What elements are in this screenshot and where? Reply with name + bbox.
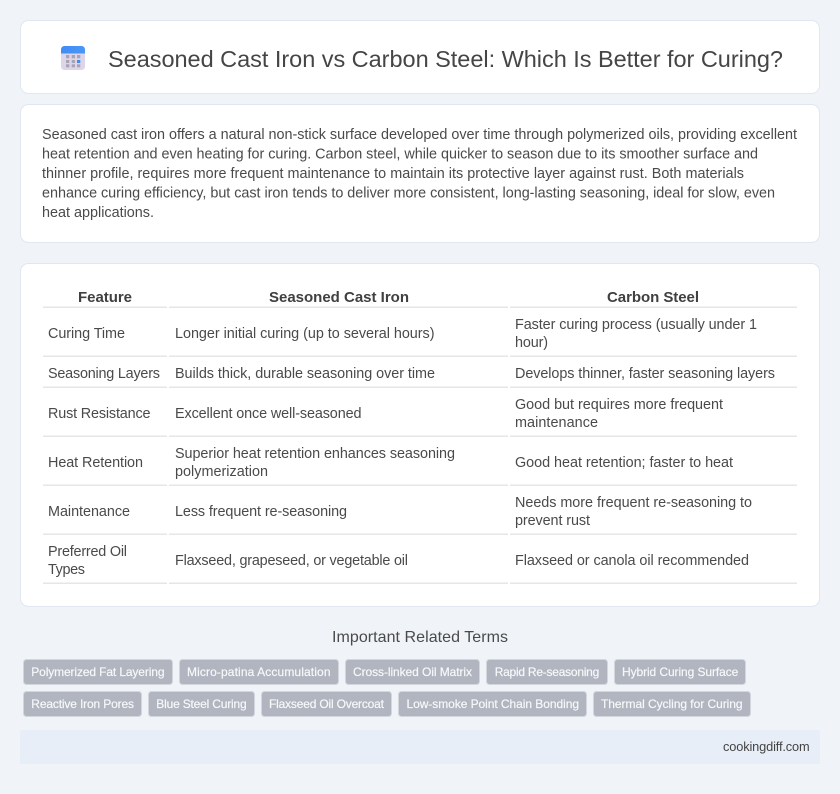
heading: important related terms: Important Related Terms <box>332 629 508 646</box>
table header row: Seasoned Cast Iron <box>269 289 409 306</box>
row: maintenance: Less frequent re-seasoning <box>175 504 347 520</box>
related term tags: Hybrid Curing Surface <box>622 665 739 679</box>
row: heat retention <box>48 446 733 480</box>
panel: introduction <box>20 104 820 242</box>
related term tags: Rapid Re-seasoning <box>495 665 599 679</box>
related term tags: Micro-patina Accumulation <box>187 665 330 679</box>
row: heat retention: Good heat retention; faster to heat <box>515 455 733 471</box>
intro paragraph: heat retention and even heating for curing. Carbon steel, while quicker to season due to its smoother surface and <box>42 146 758 162</box>
related term tags: Cross-linked Oil Matrix <box>353 665 472 679</box>
row: rust resistance <box>48 397 723 431</box>
related term tags: Blue Steel Curing <box>156 697 247 711</box>
row: rust resistance: Excellent once well-seasoned <box>175 406 362 422</box>
related term tags: Flaxseed Oil Overcoat <box>269 697 385 711</box>
row: seasoning layers <box>48 366 775 382</box>
intro paragraph: thinner profile, requires more frequent maintenance to maintain its protective layer against rust. Both materials <box>42 166 744 182</box>
row: maintenance: prevent rust <box>515 513 590 529</box>
row: heat retention: Heat Retention <box>48 455 143 471</box>
intro paragraph: heat applications. <box>42 205 154 221</box>
footer source text: cookingdiff.com <box>723 739 810 754</box>
panel: header <box>20 20 820 94</box>
row: heat retention: polymerization <box>175 464 268 480</box>
panel: comparison table <box>20 264 820 606</box>
intro paragraph: enhance curing efficiency, but cast iron tends to deliver more consistent, long-lasting seasoning, ideal for slow, even <box>42 186 775 202</box>
row: seasoning layers: Builds thick, durable seasoning over time <box>175 366 435 382</box>
row: seasoning layers: Develops thinner, faster seasoning layers <box>515 366 775 382</box>
related term tags: Thermal Cycling for Curing <box>601 697 743 711</box>
row: maintenance <box>48 495 752 529</box>
row: curing time: hour) <box>515 335 548 351</box>
table header row <box>78 289 699 306</box>
row: seasoning layers: Seasoning Layers <box>48 366 160 382</box>
row: curing time: Curing Time <box>48 326 125 342</box>
row: preferred oil types: Types <box>48 562 85 578</box>
intro paragraph <box>42 127 797 221</box>
row: curing time: Faster curing process (usually under 1 <box>515 317 757 333</box>
row: rust resistance: maintenance <box>515 415 598 431</box>
intro paragraph: Seasoned cast iron offers a natural non-stick surface developed over time through polymerized oils, providing excellent <box>42 127 797 143</box>
row: preferred oil types <box>48 544 749 578</box>
row: heat retention: Superior heat retention enhances seasoning <box>175 446 455 462</box>
row: rust resistance: Good but requires more frequent <box>515 397 723 413</box>
icon: calendar <box>61 46 85 70</box>
table header row: Feature <box>78 289 132 306</box>
related term tags: Reactive Iron Pores <box>31 697 134 711</box>
row: maintenance: Maintenance <box>48 504 130 520</box>
row: curing time <box>48 317 757 351</box>
row: curing time: Longer initial curing (up to several hours) <box>175 326 434 342</box>
row: preferred oil types: Flaxseed or canola oil recommended <box>515 553 749 569</box>
row: rust resistance: Rust Resistance <box>48 406 150 422</box>
related term tags <box>24 660 750 716</box>
related term tags: Polymerized Fat Layering <box>31 665 164 679</box>
row: preferred oil types: Flaxseed, grapeseed, or vegetable oil <box>175 553 408 569</box>
row: maintenance: Needs more frequent re-seasoning to <box>515 495 752 511</box>
related term tags: Low-smoke Point Chain Bonding <box>406 697 579 711</box>
footer bar <box>20 730 820 764</box>
table header row: Carbon Steel <box>607 289 699 306</box>
title: Seasoned Cast Iron vs Carbon Steel: Which Is Better for Curing? <box>108 46 783 72</box>
row: preferred oil types: Preferred Oil <box>48 544 127 560</box>
